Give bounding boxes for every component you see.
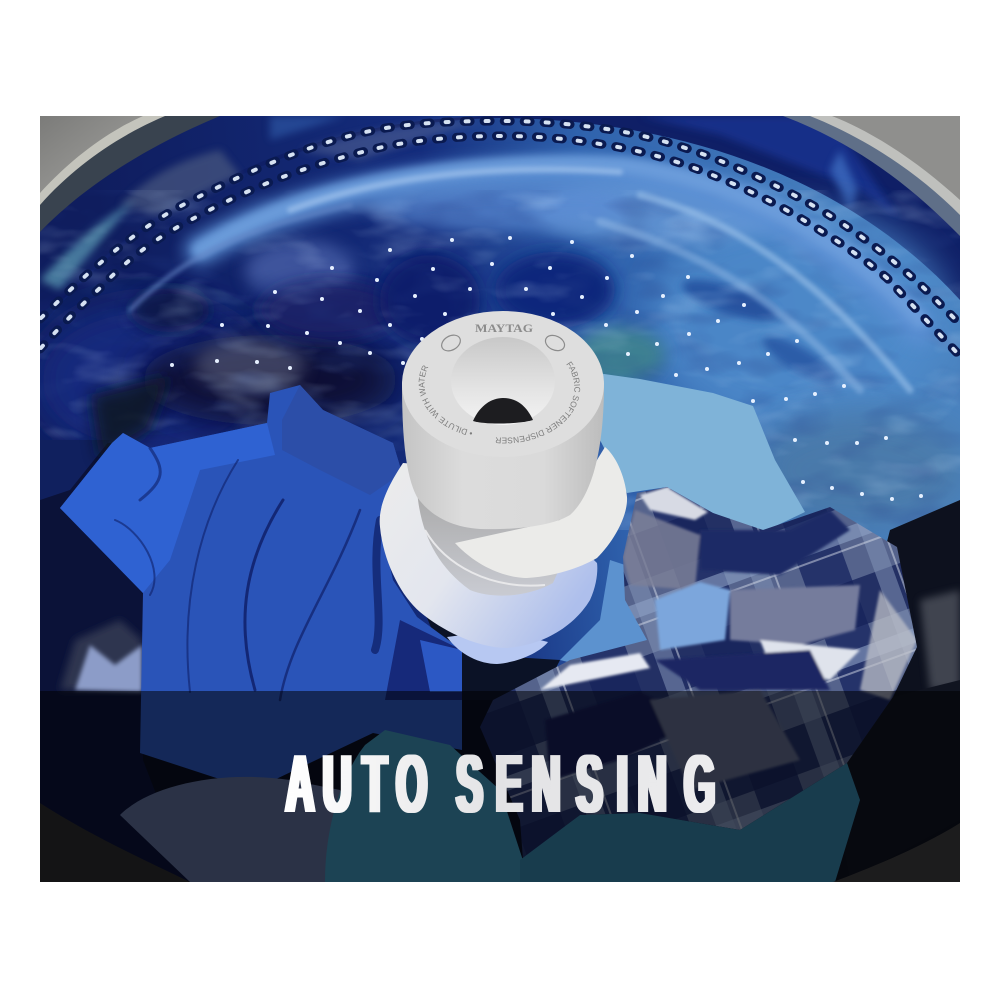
foot	[447, 636, 548, 664]
collar	[418, 498, 560, 596]
washer drum water	[30, 116, 970, 676]
curved dispenser label	[418, 362, 580, 444]
concentric highlights	[130, 164, 920, 390]
curved dispenser label: • DILUTE WITH WATER	[418, 366, 472, 435]
dark gap under dispenser	[427, 618, 560, 676]
water dimple highlights	[170, 236, 923, 501]
title: AUTO SENSING	[286, 737, 715, 830]
dark caption band	[40, 691, 960, 882]
dispenser body	[402, 384, 604, 529]
brand mark: MAYTAG	[475, 321, 533, 335]
blue garment under fin	[560, 560, 647, 662]
lower garments	[120, 730, 860, 882]
dark band above beads	[276, 116, 960, 300]
large water tints	[40, 294, 238, 448]
top face	[402, 311, 604, 457]
light blue garment	[597, 373, 805, 532]
lower water left	[40, 375, 190, 882]
center hole	[451, 337, 555, 425]
upper fin	[455, 447, 627, 578]
dark base	[143, 700, 828, 882]
curved dispenser label: FABRIC SOFTENER DISPENSER	[496, 362, 580, 444]
dispenser	[380, 311, 628, 664]
lower water right	[887, 500, 960, 688]
bottom corners	[40, 803, 960, 882]
tub bead rows	[40, 121, 960, 356]
lower fin	[380, 463, 597, 648]
photo panel	[40, 116, 960, 882]
infographic scene	[40, 116, 960, 882]
fabric softener icons	[441, 334, 566, 352]
royal blue garment	[60, 385, 462, 790]
washer rim corners	[40, 116, 960, 236]
plaid garment	[480, 487, 917, 860]
